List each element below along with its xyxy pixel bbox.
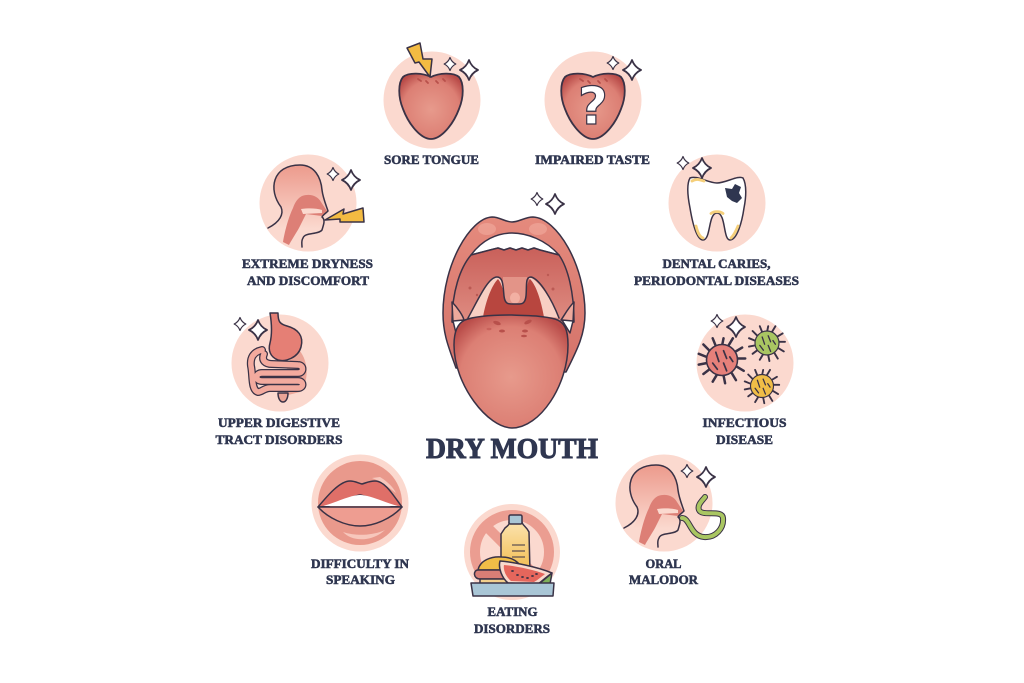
item: extreme dryness: AND DISCOMFORT xyxy=(247,273,369,288)
item: oral malodor: ORAL xyxy=(646,556,682,571)
tonsil pillars xyxy=(468,277,559,318)
item: difficulty in speaking xyxy=(311,454,410,587)
lips xyxy=(443,217,585,372)
item: impaired taste xyxy=(535,52,650,167)
item: difficulty in speaking: DIFFICULTY IN xyxy=(311,556,410,571)
item: infectious disease: DISEASE xyxy=(716,432,773,447)
item: infectious disease xyxy=(696,314,794,447)
burger xyxy=(478,557,522,570)
item: dental caries: DENTAL CARIES, xyxy=(662,256,770,271)
tray xyxy=(471,583,554,596)
item: dental caries: PERIODONTAL DISEASES xyxy=(634,273,799,288)
item: eating disorders xyxy=(464,504,560,636)
item: oral malodor: MALODOR xyxy=(629,572,699,587)
watermelon xyxy=(540,573,552,584)
upper teeth xyxy=(471,233,559,255)
item: impaired taste: IMPAIRED TASTE xyxy=(535,152,650,167)
tongue xyxy=(454,315,568,428)
palate xyxy=(452,248,574,326)
cheeks and tooth corners xyxy=(452,302,464,322)
item: impaired taste: ? xyxy=(578,77,608,137)
title: DRY MOUTH xyxy=(426,434,598,465)
throat and uvula xyxy=(483,279,544,317)
item: infectious disease: INFECTIOUS xyxy=(702,415,786,430)
item: sore tongue: SORE TONGUE xyxy=(384,152,479,167)
sparkles: mouth xyxy=(531,192,564,214)
item: dental caries xyxy=(634,154,799,288)
item: upper digestive tract disorders xyxy=(216,313,342,447)
item: upper digestive tract disorders: TRACT DISORDERS xyxy=(216,432,342,447)
item: oral malodor xyxy=(616,454,723,587)
item: upper digestive tract disorders: UPPER DIGESTIVE xyxy=(218,415,340,430)
item: eating disorders: EATING xyxy=(488,604,538,619)
item: sore tongue xyxy=(384,43,480,167)
item: extreme dryness: EXTREME DRYNESS xyxy=(242,256,373,271)
item: extreme dryness xyxy=(242,154,373,288)
item: difficulty in speaking: SPEAKING xyxy=(326,572,395,587)
item: eating disorders: DISORDERS xyxy=(474,621,550,636)
central mouth illustration xyxy=(443,217,585,428)
bottle xyxy=(501,522,530,572)
